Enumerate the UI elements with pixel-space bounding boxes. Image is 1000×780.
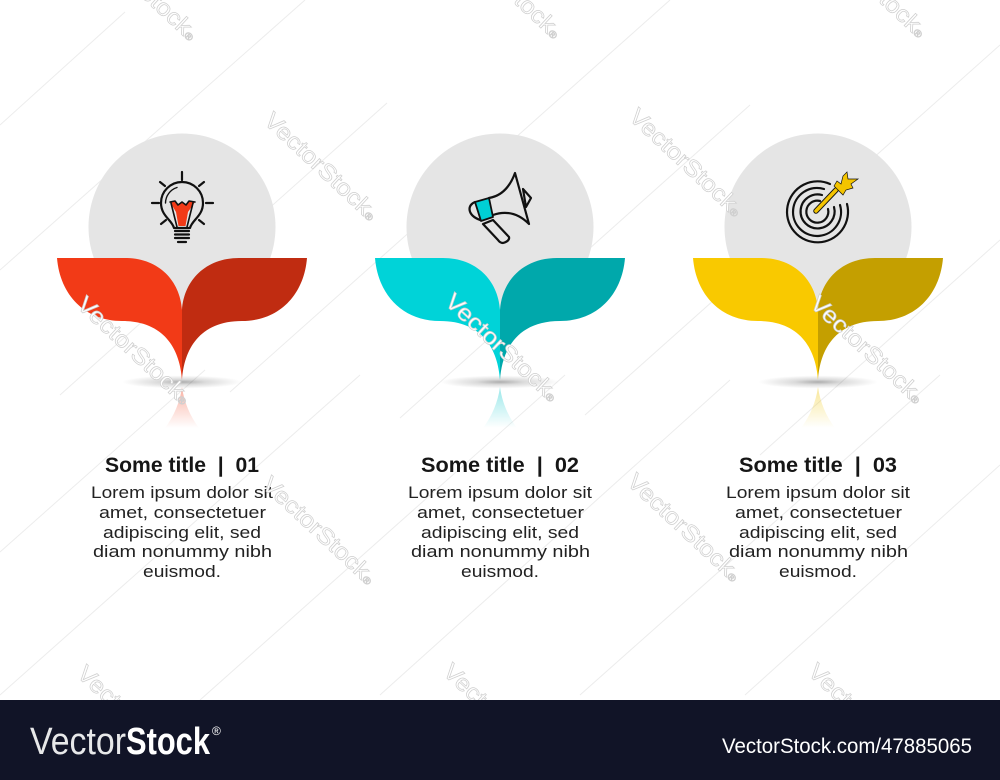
text block: step 3: [726, 454, 910, 581]
body 1: Lorem ipsum dolor sit: [91, 484, 273, 502]
body 3: amet, consectetuer: [735, 504, 903, 522]
reflection 3: [801, 387, 835, 428]
panel: step 1 graphic: [57, 134, 307, 428]
body 3: [726, 484, 910, 581]
footer logo: Stock: [126, 721, 211, 763]
right petal 1: [182, 258, 307, 380]
body 2: adipiscing elit, sed: [421, 524, 579, 542]
shadow 1: [122, 376, 242, 388]
panel: step 3 graphic: [693, 134, 943, 428]
shadow 2: [440, 376, 560, 388]
left petal 1: [57, 258, 182, 380]
body 1: amet, consectetuer: [99, 504, 267, 522]
watermarks: VectorStock ®: [438, 658, 563, 777]
text block: step 1: [91, 454, 273, 581]
reflection 2: [483, 387, 517, 428]
footer logo: [30, 721, 221, 763]
watermarks: VectorStock ®: [622, 468, 747, 587]
grey circle 2: [406, 134, 594, 320]
body 2: [408, 484, 592, 581]
body 2: diam nonummy nibh: [411, 543, 590, 561]
body 2: amet, consectetuer: [417, 504, 585, 522]
body 2: euismod.: [461, 563, 539, 581]
icon: target with arrow: [787, 172, 858, 242]
text block: step 2: [408, 454, 592, 581]
icon: megaphone: [470, 173, 531, 243]
body 3: euismod.: [779, 563, 857, 581]
right petal 2: [500, 258, 625, 380]
watermarks: VectorStock ®: [259, 107, 384, 226]
watermarks: VectorStock ®: [440, 288, 565, 407]
heading 3: Some title | 03: [739, 454, 897, 477]
body 3: Lorem ipsum dolor sit: [726, 484, 910, 502]
right petal 3: [818, 258, 943, 380]
footer logo: ®: [212, 724, 221, 738]
footer bar: [0, 700, 1000, 780]
footer logo: Vector: [30, 721, 126, 763]
footer image id: VectorStock.com/47885065: [722, 735, 972, 758]
heading 2: Some title | 02: [421, 454, 579, 477]
watermarks: VectorStock ®: [624, 103, 749, 222]
body 3: diam nonummy nibh: [729, 543, 908, 561]
watermarks: VectorStock ®: [805, 290, 930, 409]
body 3: adipiscing elit, sed: [739, 524, 897, 542]
body 1: [91, 484, 273, 581]
reflection 1: [165, 387, 199, 428]
body 1: diam nonummy nibh: [93, 543, 272, 561]
panel: step 2 graphic: [375, 134, 625, 428]
heading 1: Some title | 01: [105, 454, 259, 477]
grey circle 1: [88, 134, 276, 320]
icon: light bulb: [152, 172, 213, 242]
grey circle 3: [724, 134, 912, 320]
body 2: Lorem ipsum dolor sit: [408, 484, 592, 502]
shadow 3: [758, 376, 878, 388]
watermarks: VectorStock ®: [72, 291, 197, 410]
watermarks: VectorStock ®: [803, 658, 928, 777]
watermarks: VectorStock ®: [257, 471, 382, 590]
left petal 2: [375, 258, 500, 380]
left petal 3: [693, 258, 818, 380]
body 1: adipiscing elit, sed: [103, 524, 261, 542]
watermarks: VectorStock ®: [72, 660, 197, 779]
body 1: euismod.: [143, 563, 221, 581]
